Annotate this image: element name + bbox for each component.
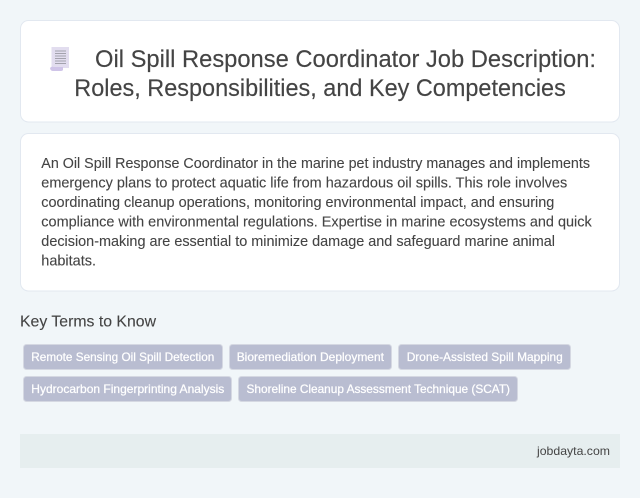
tag: shoreline	[238, 376, 518, 402]
heading: title	[74, 46, 596, 102]
text block: description: An Oil Spill Response Coordinator in the marine pet industry manages and implements	[41, 156, 590, 172]
footer source text: jobdayta.com	[536, 444, 610, 458]
heading: key terms: Key Terms to Know	[20, 314, 156, 331]
panel: title card	[20, 20, 620, 122]
tag list: key terms	[24, 344, 570, 402]
text block: description: coordinating cleanup operations, monitoring environmental impact, and ensuring	[41, 195, 554, 211]
icon: paper scroll	[50, 47, 69, 71]
tag: bioremediation: Bioremediation Deployment	[237, 350, 385, 364]
text block: description: emergency plans to protect aquatic life from hazardous oil spills. This role involves	[41, 176, 567, 192]
heading: title: Roles, Responsibilities, and Key Competencies	[74, 75, 566, 102]
text block: description	[41, 156, 593, 270]
tag: remote sensing	[24, 344, 222, 370]
text block: description: compliance with environmental regulations. Expertise in marine ecosystems and quick	[41, 214, 593, 230]
tag: bioremediation	[230, 344, 392, 370]
text block: description: decision-making are essential to minimize damage and safeguard marine animal	[41, 234, 555, 250]
tag: remote sensing: Remote Sensing Oil Spill Detection	[31, 350, 214, 364]
tag: hydrocarbon: Hydrocarbon Fingerprinting Analysis	[31, 382, 224, 396]
text block: description: habitats.	[41, 254, 96, 270]
heading: title: Oil Spill Response Coordinator Job Description:	[95, 46, 596, 73]
tag: hydrocarbon	[24, 376, 232, 402]
footer bar	[20, 434, 620, 468]
tag: drone mapping: Drone-Assisted Spill Mapping	[407, 350, 563, 364]
tag: shoreline: Shoreline Cleanup Assessment Technique (SCAT)	[246, 382, 510, 396]
tag: drone mapping	[398, 344, 570, 370]
panel: description card	[20, 134, 620, 291]
